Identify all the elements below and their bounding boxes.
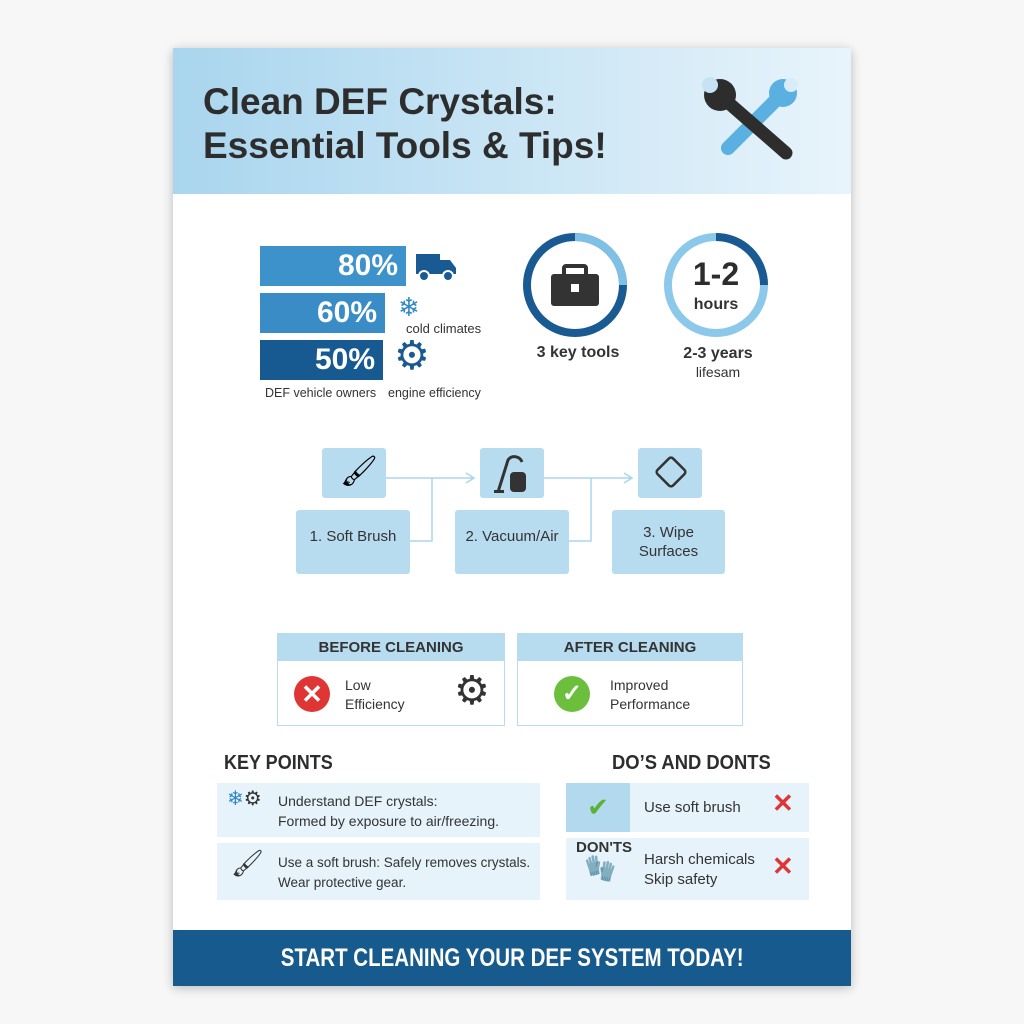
key point 2: Wear protective gear.: [278, 875, 406, 890]
stat: tools: [523, 233, 627, 361]
panel: before: BEFORE CLEANING: [318, 639, 464, 656]
stat: hours: [664, 233, 768, 380]
dont row: [566, 838, 809, 900]
panel: after: [517, 633, 743, 726]
icon: check: ✓: [562, 680, 582, 707]
step 3: Surfaces: [639, 543, 698, 560]
step 3: 3. Wipe: [643, 524, 694, 541]
bar chart: [260, 246, 481, 400]
key point 2: Use a soft brush: Safely removes crystals.: [278, 855, 530, 870]
stat: tools: 3 key tools: [537, 344, 619, 361]
do row: Use soft brush: [644, 799, 741, 816]
step 1: 1. Soft Brush: [310, 528, 396, 544]
title: Clean DEF Crystals:: [203, 81, 557, 122]
footer banner: [173, 930, 851, 986]
icon: wrench: [702, 77, 798, 160]
dont row: ✕: [772, 851, 794, 881]
key point 1: [217, 783, 540, 837]
heading: dos and donts: DO’S AND DONTS: [612, 752, 771, 774]
dont row: 🧤: [584, 853, 616, 883]
stat: hours: 2-3 years: [683, 345, 753, 362]
icon: snowflake: ❄: [398, 292, 420, 322]
step 2: 2. Vacuum/Air: [465, 528, 559, 544]
title: Essential Tools & Tips!: [203, 125, 607, 166]
panel: after: Improved: [610, 677, 668, 693]
key point 1: ❄⚙: [227, 788, 262, 810]
icon: x: ✕: [301, 679, 323, 709]
header band: [173, 48, 851, 194]
key point 1: Understand DEF crystals:: [278, 793, 438, 809]
bar chart: cold climates: [406, 321, 481, 336]
step 2: [455, 510, 569, 574]
dont row: DON'TS: [576, 839, 632, 856]
flow diagram: [296, 448, 725, 574]
dont row: Harsh chemicals: [644, 851, 755, 868]
icon: vacuum: [480, 448, 544, 498]
key point 2: 🖌: [231, 848, 264, 878]
key point 1: Formed by exposure to air/freezing.: [278, 813, 499, 829]
bar chart: 60%: [317, 296, 377, 329]
title: [203, 81, 607, 166]
do row: ✕: [772, 788, 794, 818]
do row: [566, 783, 809, 832]
step 1: [296, 510, 410, 574]
panel: before: Low: [345, 677, 371, 693]
panel: after: Performance: [610, 696, 690, 712]
bar chart: 50%: [315, 343, 375, 376]
card: [173, 48, 851, 986]
panel: after: AFTER CLEANING: [564, 639, 696, 656]
panel: before: [277, 633, 505, 726]
icon: brush: [322, 448, 386, 498]
do row: ✔: [587, 792, 609, 822]
key point 2: [217, 843, 540, 900]
icon: check: [554, 676, 590, 712]
bar chart: engine efficiency: [388, 386, 481, 400]
bar chart: DEF vehicle owners: [265, 386, 376, 400]
footer banner: START CLEANING YOUR DEF SYSTEM TODAY!: [281, 944, 743, 972]
stat: hours: 1-2: [693, 256, 739, 292]
bar chart: 80%: [338, 249, 398, 282]
dont row: Skip safety: [644, 871, 717, 888]
icon: x: [294, 676, 330, 712]
icon: brush: 🖌: [340, 455, 378, 488]
stat: hours: lifesam: [696, 364, 740, 380]
icon: gear: ⚙: [454, 669, 490, 713]
panel: before: Efficiency: [345, 696, 405, 712]
icon: gear: ⚙: [394, 334, 430, 378]
step 3: [612, 510, 725, 574]
icon: truck: [416, 254, 456, 280]
heading: key points: KEY POINTS: [224, 752, 333, 774]
icon: wipe: [638, 448, 702, 498]
stat: hours: hours: [694, 296, 738, 313]
